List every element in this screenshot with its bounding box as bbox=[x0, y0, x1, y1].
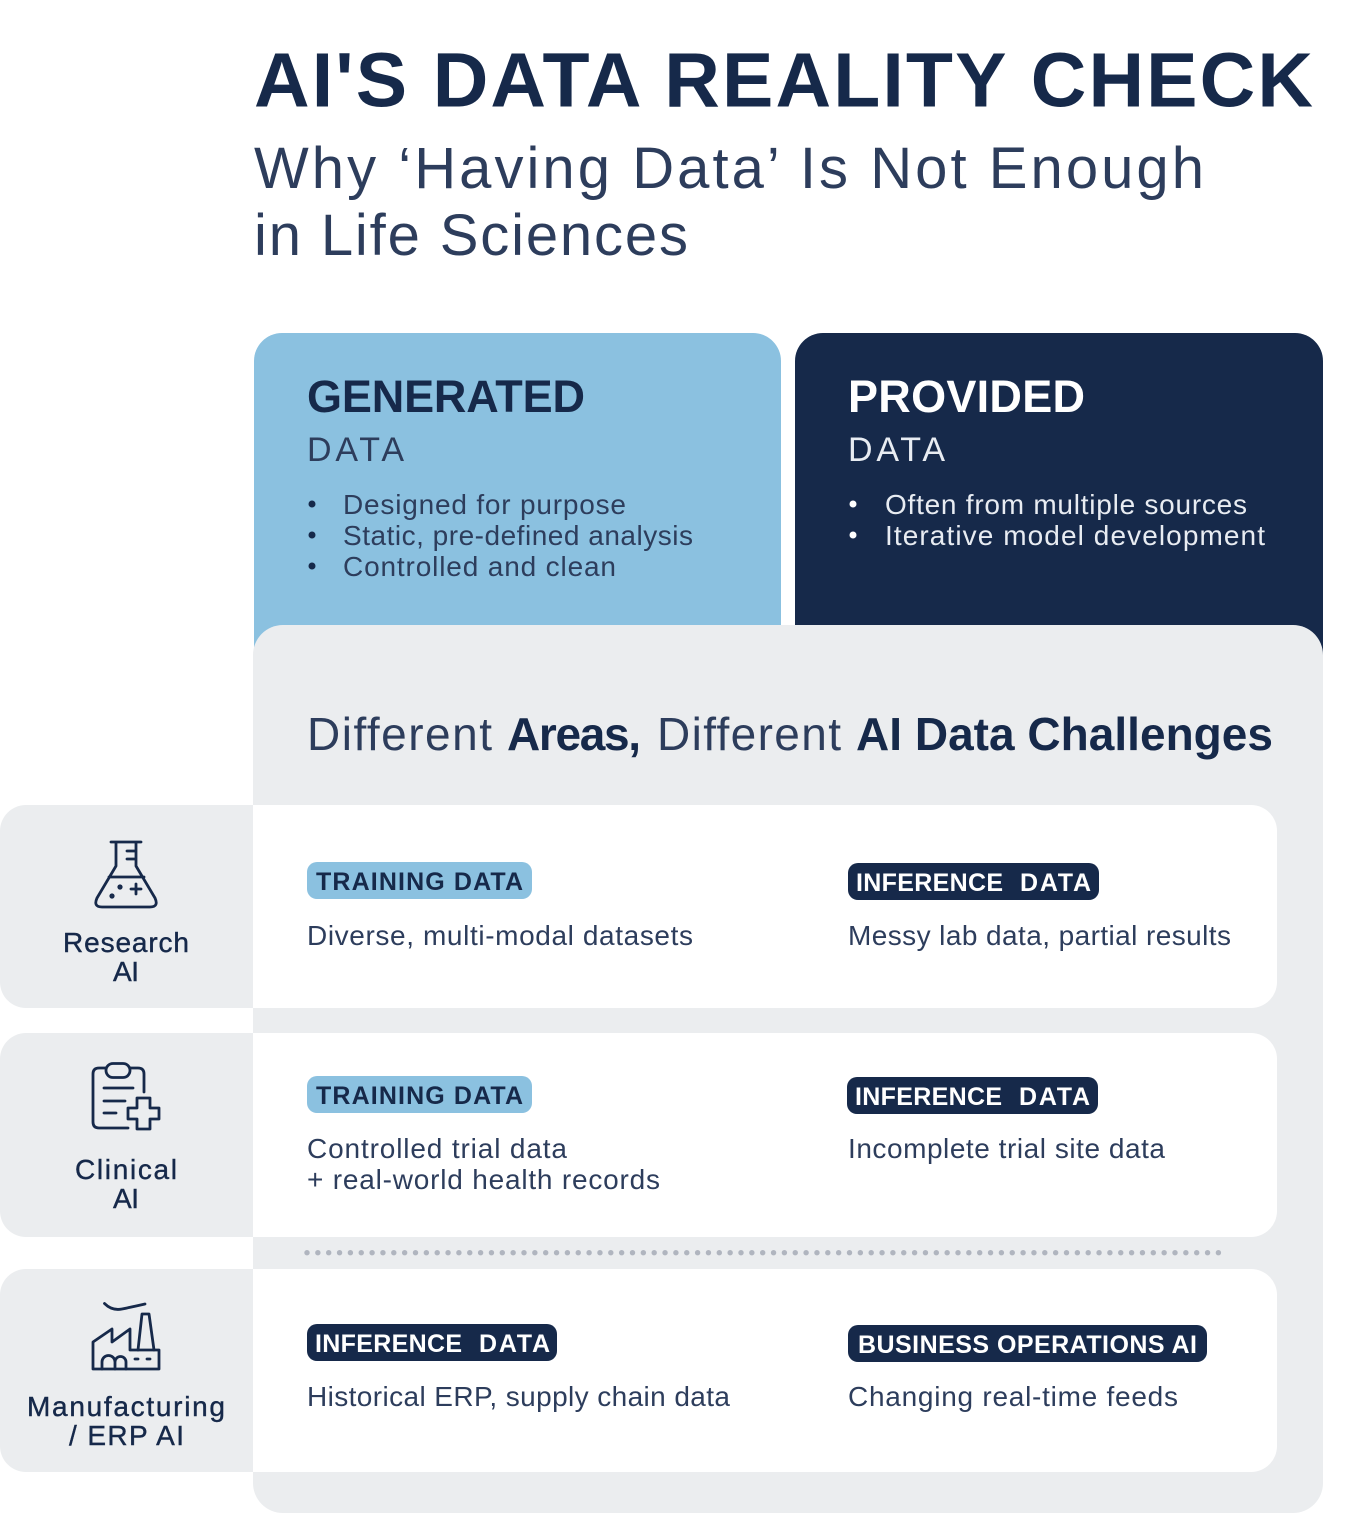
inference data tag: INFERENCE bbox=[315, 1330, 462, 1358]
inference data tag: INFERENCE bbox=[855, 1083, 1002, 1111]
provided bullet list: Often from multiple sources bbox=[885, 489, 1247, 520]
provided bullet list bbox=[850, 489, 1265, 551]
panel: challenges background bbox=[253, 625, 1323, 1513]
inference description: Incomplete trial site data bbox=[848, 1133, 1165, 1164]
training data tag bbox=[307, 1076, 532, 1113]
manufacturing label: / ERP AI bbox=[69, 1420, 184, 1451]
row: clinical AI bbox=[0, 1033, 1277, 1237]
panel: provided data bbox=[795, 333, 1323, 680]
manufacturing card bbox=[253, 1269, 1277, 1472]
inference data tag bbox=[847, 1077, 1098, 1114]
generated heading: GENERATED bbox=[307, 371, 585, 422]
generated subheading: DATA bbox=[307, 431, 404, 469]
training data tag: TRAINING DATA bbox=[316, 1082, 523, 1110]
training description bbox=[307, 1133, 660, 1195]
subtitle: in Life Sciences bbox=[254, 203, 688, 268]
section heading bbox=[307, 708, 1273, 760]
manufacturing label: Manufacturing bbox=[27, 1391, 225, 1422]
training description: Controlled trial data bbox=[307, 1133, 567, 1164]
research tab bbox=[0, 805, 253, 1008]
icon: flask bbox=[96, 842, 156, 907]
manufacturing tab bbox=[0, 1269, 253, 1472]
inference description: Messy lab data, partial results bbox=[848, 920, 1231, 951]
research card bbox=[253, 805, 1277, 1008]
generated bullet list: Designed for purpose bbox=[343, 489, 626, 520]
manufacturing label bbox=[27, 1391, 225, 1451]
inference data tag: DATA bbox=[1019, 1083, 1090, 1111]
generated bullet list bbox=[308, 489, 693, 582]
inference data tag bbox=[848, 863, 1099, 900]
row: research AI bbox=[0, 805, 1277, 1008]
training description: Diverse, multi-modal datasets bbox=[307, 920, 693, 951]
inference data tag: DATA bbox=[1020, 869, 1091, 897]
inference data tag bbox=[307, 1324, 557, 1361]
icon: clipboard with cross bbox=[93, 1064, 159, 1129]
training data tag: TRAINING DATA bbox=[316, 868, 523, 896]
subtitle: Why ‘Having Data’ Is Not Enough bbox=[254, 136, 1204, 201]
generated bullet list: Controlled and clean bbox=[343, 551, 616, 582]
clinical label bbox=[75, 1154, 177, 1214]
section heading: AI Data Challenges bbox=[856, 708, 1273, 760]
research label bbox=[63, 927, 189, 987]
clinical card bbox=[253, 1033, 1277, 1237]
clinical label: AI bbox=[113, 1183, 139, 1214]
inference data tag: DATA bbox=[479, 1330, 550, 1358]
subtitle bbox=[254, 136, 1204, 268]
clinical label: Clinical bbox=[75, 1154, 177, 1185]
training description: + real-world health records bbox=[307, 1164, 660, 1195]
research label: Research bbox=[63, 927, 189, 958]
icon: factory bbox=[93, 1304, 159, 1369]
section heading: Different bbox=[657, 708, 841, 760]
title: AI'S DATA REALITY CHECK bbox=[254, 38, 1313, 124]
training data tag bbox=[307, 862, 532, 899]
clinical tab bbox=[0, 1033, 253, 1237]
business operations description: Changing real-time feeds bbox=[848, 1381, 1178, 1412]
section heading: Areas, bbox=[507, 708, 641, 760]
section heading: Different bbox=[307, 708, 492, 760]
panel: generated data bbox=[254, 333, 781, 680]
business operations tag: BUSINESS OPERATIONS AI bbox=[858, 1331, 1197, 1359]
provided bullet list: Iterative model development bbox=[885, 520, 1265, 551]
provided heading: PROVIDED bbox=[848, 371, 1085, 422]
generated bullet list: Static, pre-defined analysis bbox=[343, 520, 693, 551]
provided subheading: DATA bbox=[848, 431, 945, 469]
row: manufacturing / ERP AI bbox=[0, 1269, 1277, 1472]
inference data tag: INFERENCE bbox=[856, 869, 1003, 897]
inference description: Historical ERP, supply chain data bbox=[307, 1381, 730, 1412]
research label: AI bbox=[113, 956, 139, 987]
